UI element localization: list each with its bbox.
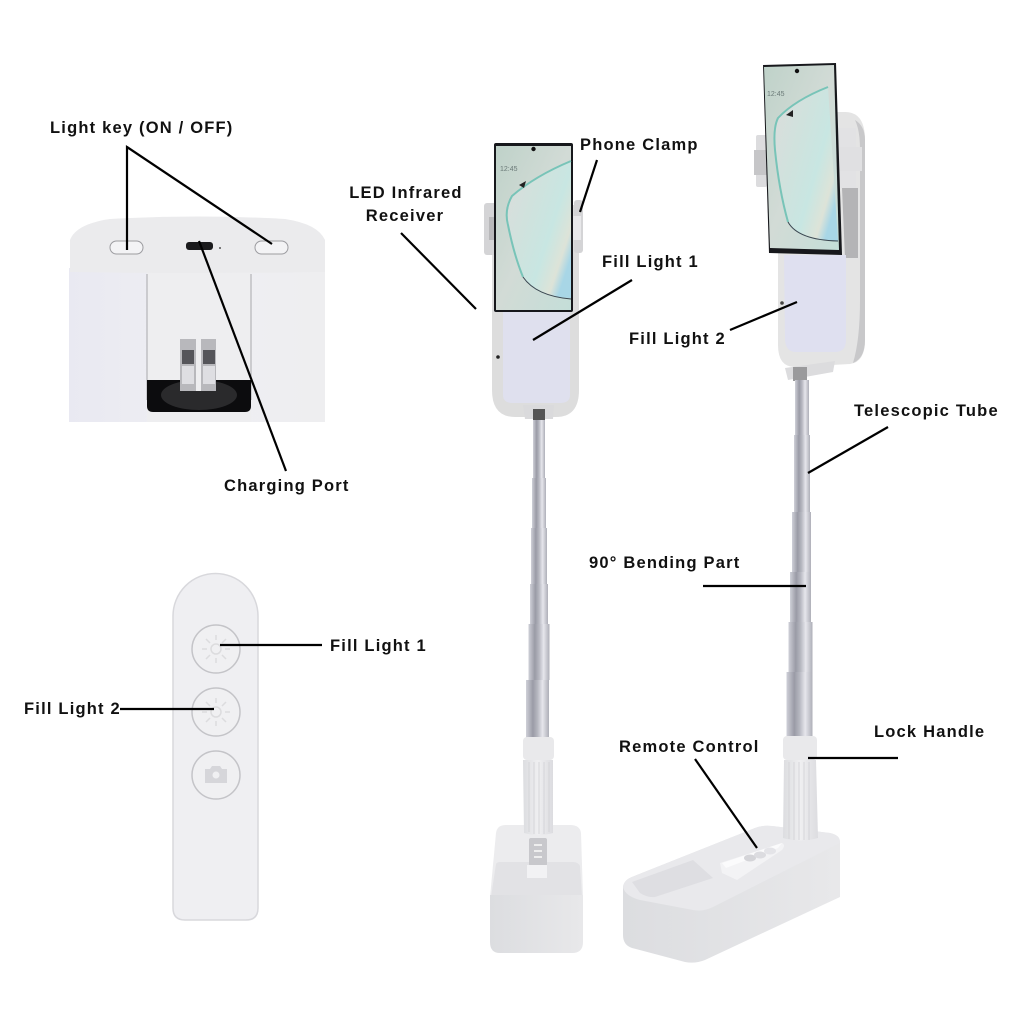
arrow: lock handle bbox=[808, 757, 898, 759]
phone clock: 12:45 bbox=[500, 166, 518, 173]
box lower body bbox=[69, 268, 325, 422]
button: fill light 1 bbox=[192, 625, 240, 673]
phone clock: 12:45 bbox=[767, 91, 785, 98]
panel: stand front view bbox=[484, 143, 583, 953]
button: fill light 2 bbox=[192, 688, 240, 736]
label: LED infrared receiver: LED Infrared bbox=[349, 184, 463, 202]
right light button bbox=[255, 241, 288, 254]
arrow: remote fill light 1 bbox=[220, 644, 322, 646]
light panel body bbox=[778, 112, 865, 367]
head mount bbox=[785, 361, 835, 380]
black window bbox=[147, 380, 251, 412]
arrow: phone clamp bbox=[580, 160, 597, 212]
label: charging port: Charging Port bbox=[224, 477, 350, 495]
phone bbox=[763, 63, 842, 255]
label: light key: Light key (ON / OFF) bbox=[50, 119, 234, 137]
box top cap bbox=[70, 216, 325, 273]
charging port bbox=[186, 242, 213, 250]
arrow: fill light 1 bbox=[533, 280, 632, 340]
telescopic tube bbox=[786, 380, 812, 738]
base bbox=[623, 826, 840, 963]
arrow: LED infrared receiver bbox=[401, 233, 476, 309]
label: 90 degree bending part: 90° Bending Part bbox=[589, 554, 740, 572]
panel: charging box close-up bbox=[69, 216, 325, 422]
button: camera bbox=[192, 751, 240, 799]
telescopic tube bbox=[526, 420, 550, 738]
arrow: bending part bbox=[703, 585, 806, 587]
arrow: remote control bbox=[695, 759, 757, 848]
remote body bbox=[173, 574, 258, 920]
panel: stand angled view bbox=[623, 63, 865, 963]
fill light 1 surface bbox=[503, 312, 570, 403]
arrow: remote fill light 2 bbox=[120, 708, 214, 710]
arrow: fill light 2 bbox=[730, 302, 797, 330]
tray recess bbox=[632, 860, 713, 897]
label: lock handle: Lock Handle bbox=[874, 723, 985, 741]
back clamp bbox=[754, 128, 862, 188]
label: telescopic tube: Telescopic Tube bbox=[854, 402, 999, 420]
box centre recess bbox=[147, 272, 251, 422]
base connector bbox=[529, 838, 547, 866]
lock collar bbox=[783, 736, 817, 760]
left light button bbox=[110, 241, 143, 254]
hinge bbox=[180, 339, 216, 391]
stored remote bbox=[720, 843, 784, 880]
label: remote control: Remote Control bbox=[619, 738, 760, 756]
arrow: light key bbox=[127, 147, 272, 250]
label: LED infrared receiver: Receiver bbox=[366, 207, 444, 225]
label: remote fill light 2: Fill Light 2 bbox=[24, 700, 121, 718]
fill light 2 surface bbox=[784, 255, 846, 352]
lock collar bbox=[523, 737, 554, 760]
grip bbox=[783, 760, 818, 840]
side clamps bbox=[484, 200, 583, 255]
label: fill light 2: Fill Light 2 bbox=[629, 330, 726, 348]
label: fill light 1: Fill Light 1 bbox=[602, 253, 699, 271]
base top deck bbox=[623, 826, 840, 911]
arrow: telescopic tube bbox=[808, 427, 888, 473]
grip bbox=[523, 760, 553, 835]
head mount bbox=[523, 405, 554, 419]
light panel body bbox=[492, 205, 579, 417]
panel: remote control bbox=[173, 574, 258, 920]
base bbox=[490, 825, 583, 953]
label: phone clamp: Phone Clamp bbox=[580, 136, 699, 154]
phone bbox=[494, 143, 573, 312]
label: remote fill light 1: Fill Light 1 bbox=[330, 637, 427, 655]
arrow: charging port bbox=[199, 241, 286, 471]
base front faces bbox=[623, 826, 840, 963]
